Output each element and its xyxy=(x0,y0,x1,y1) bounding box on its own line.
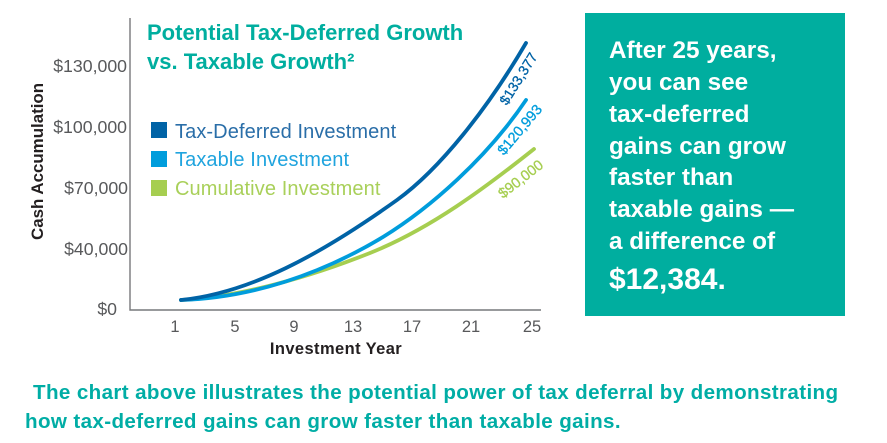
legend: Tax-Deferred Investment xyxy=(175,121,397,143)
y axis title: Cash Accumulation xyxy=(28,83,47,240)
y axis tick labels: $0 xyxy=(97,299,117,319)
callout panel: tax-deferred xyxy=(609,101,749,128)
y axis tick labels xyxy=(53,56,128,319)
chart title: vs. Taxable Growth² xyxy=(147,49,354,74)
callout panel: faster than xyxy=(609,164,733,191)
value label: taxable: $120,993 xyxy=(495,102,546,159)
footnote text: The chart above illustrates the potential power of tax deferral by demonstrating xyxy=(33,381,838,404)
callout panel: After 25 years, xyxy=(609,37,776,64)
callout panel xyxy=(585,13,845,316)
chart title xyxy=(147,20,463,74)
x axis tick labels: 1 xyxy=(170,318,180,336)
chart title: Potential Tax-Deferred Growth xyxy=(147,20,463,45)
curve: cumulative investment xyxy=(181,149,534,300)
callout panel: $12,384. xyxy=(609,263,726,296)
legend: Taxable Investment xyxy=(175,149,349,171)
x axis tick labels: 9 xyxy=(289,318,299,336)
value label: tax-deferred: $133,377 xyxy=(496,49,541,108)
footnote text: how tax-deferred gains can grow faster than taxable gains. xyxy=(25,410,621,433)
callout panel: taxable gains — xyxy=(609,196,794,223)
x axis tick labels: 13 xyxy=(344,318,362,336)
x axis tick labels: 21 xyxy=(462,318,480,336)
legend xyxy=(151,121,397,200)
x axis title: Investment Year xyxy=(270,340,402,358)
y axis tick labels: $130,000 xyxy=(53,56,127,76)
callout panel: gains can grow xyxy=(609,133,786,160)
y axis tick labels: $100,000 xyxy=(53,117,127,137)
x axis tick labels xyxy=(170,318,541,336)
y axis tick labels: $70,000 xyxy=(64,178,128,198)
y axis tick labels: $40,000 xyxy=(64,239,128,259)
curve: tax-deferred investment xyxy=(181,43,526,300)
curve: taxable investment xyxy=(181,100,526,300)
x axis tick labels: 17 xyxy=(403,318,421,336)
chart axes xyxy=(130,18,541,310)
x axis tick labels: 5 xyxy=(230,318,240,336)
legend: Cumulative Investment xyxy=(175,178,381,200)
callout panel: a difference of xyxy=(609,228,775,255)
x axis tick labels: 25 xyxy=(523,318,541,336)
value label: cumulative: $90,000 xyxy=(496,157,547,202)
callout panel: you can see xyxy=(609,69,748,96)
footnote text xyxy=(25,381,838,433)
